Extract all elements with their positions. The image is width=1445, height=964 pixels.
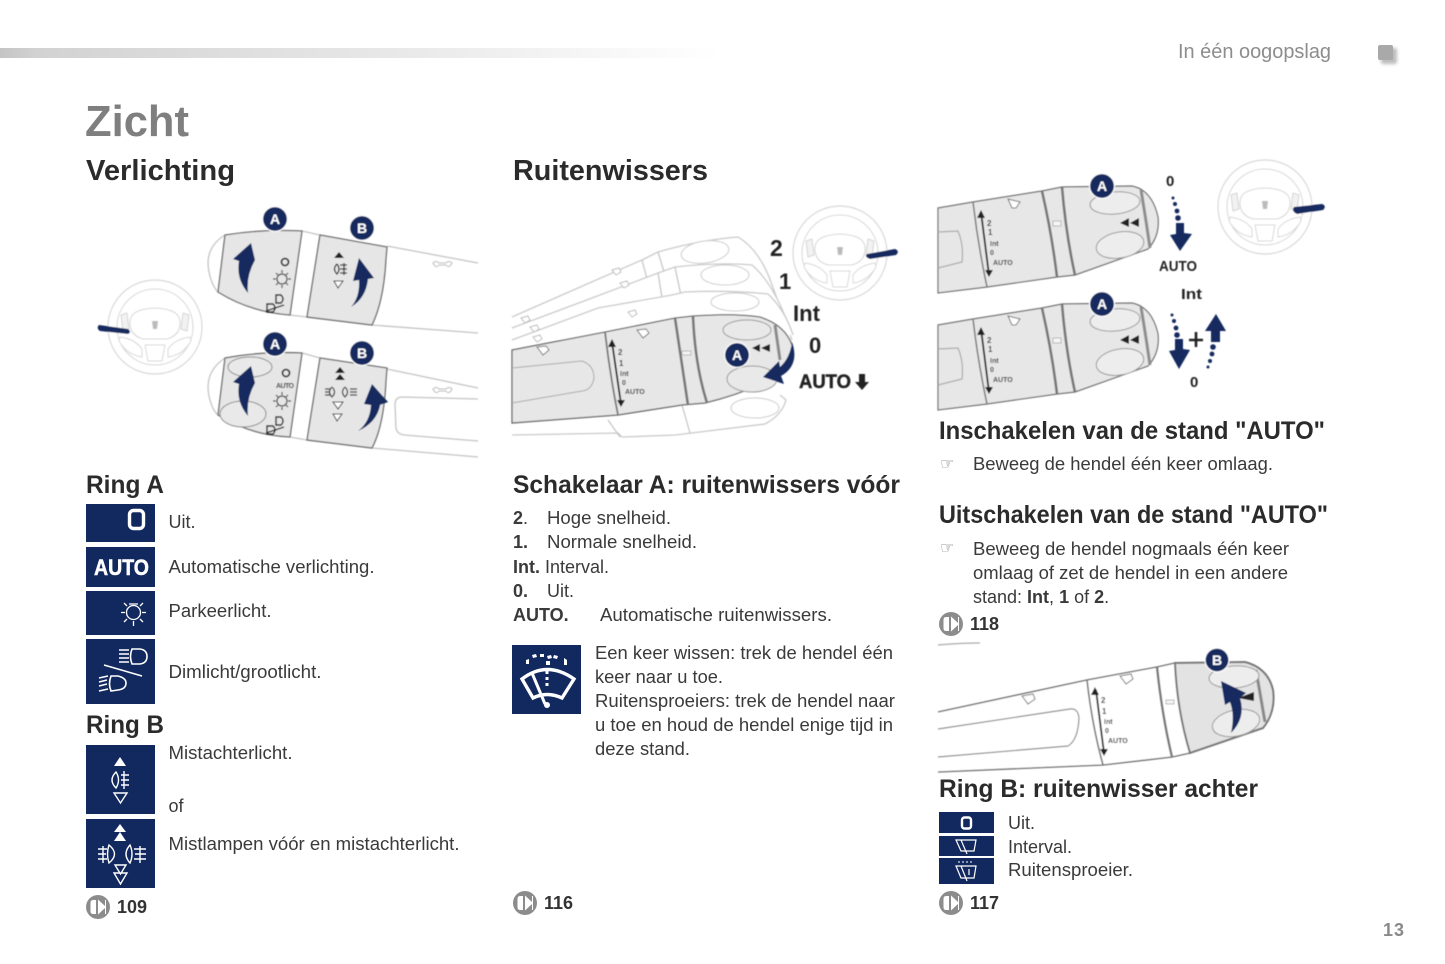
diagram: rear wiper stalk: AUTO xyxy=(1108,738,1128,745)
list: wiper positions: Uit. xyxy=(547,581,574,601)
icon: section marker xyxy=(1378,45,1397,64)
row: rear off xyxy=(939,812,1035,833)
row: rear washer xyxy=(939,858,1133,884)
reference 116 xyxy=(513,891,573,915)
reference 117: 117 xyxy=(970,893,999,913)
badge A xyxy=(262,206,288,232)
list: wiper positions: 1. xyxy=(513,532,528,552)
lower stalk: AUTO xyxy=(276,383,295,390)
text: wash wipe instructions xyxy=(595,643,895,759)
diagram: rear wiper stalk: 2 xyxy=(1101,696,1106,705)
row: dipped and main beam xyxy=(86,639,322,704)
page number: 13 xyxy=(1383,920,1404,940)
list: wiper positions: Normale snelheid. xyxy=(547,532,697,552)
badge A: A xyxy=(270,211,280,227)
main stalk: Int xyxy=(620,371,629,378)
ring symbols xyxy=(282,258,288,266)
ghost positions xyxy=(512,237,793,437)
list: wiper positions: 2. xyxy=(513,508,528,528)
ring symbols xyxy=(282,370,290,376)
badge A: A xyxy=(1097,178,1107,194)
heading: switch A: Schakelaar A: ruitenwissers vóór xyxy=(513,471,900,499)
text: disable auto: stand: Int, 1 of 2. xyxy=(973,587,1109,607)
text: wash wipe instructions: Een keer wissen: trek de hendel één xyxy=(595,643,893,663)
text: wash wipe instructions: deze stand. xyxy=(595,739,690,759)
main stalk: 2 xyxy=(618,348,623,357)
text: enable auto: ☞ xyxy=(940,454,954,473)
text: enable auto: Beweeg de hendel één keer omlaag. xyxy=(973,454,1273,474)
lower stalk xyxy=(208,332,478,457)
badge B: B xyxy=(1212,652,1222,668)
arrow xyxy=(1221,681,1246,733)
position labels: 2 xyxy=(770,235,783,261)
position labels: AUTO xyxy=(1159,258,1197,275)
position labels: Int xyxy=(793,301,821,326)
arrow xyxy=(763,342,794,384)
row: parking light xyxy=(86,591,272,635)
arrow xyxy=(233,366,255,416)
row: rear off: Uit. xyxy=(1008,813,1035,833)
list: wiper positions: Hoge snelheid. xyxy=(547,508,671,528)
heading: disable auto: Uitschakelen van de stand "AUTO" xyxy=(939,501,1328,529)
main stalk: 0 xyxy=(622,380,626,387)
arrows: down plus up xyxy=(1169,314,1226,369)
panel: auto mode xyxy=(938,160,1328,636)
list: wiper positions: AUTO. xyxy=(513,605,569,625)
panel: ruitenwissers xyxy=(512,155,900,915)
text: wash wipe instructions: keer naar u toe. xyxy=(595,667,723,687)
row: front and rear fog lights xyxy=(86,819,460,888)
badge A xyxy=(262,332,288,356)
steering wheel xyxy=(98,280,202,374)
diagram: rear wiper stalk xyxy=(938,643,1274,772)
list: wiper positions: Automatische ruitenwissers. xyxy=(600,605,832,625)
diagram: auto stalks xyxy=(938,160,1325,410)
row: rear interval xyxy=(939,836,1072,857)
diagram: rear wiper stalk: Int xyxy=(1104,719,1113,726)
heading: verlichting: Verlichting xyxy=(86,155,235,187)
main stalk xyxy=(512,315,794,423)
header gradient bar xyxy=(0,48,720,58)
position labels: 0 xyxy=(1190,374,1198,391)
reference 109: 109 xyxy=(117,897,147,917)
row: rear interval: Interval. xyxy=(1008,837,1072,857)
text: wash wipe instructions: u toe en houd de hendel enige tijd in xyxy=(595,715,893,735)
icon: wash wipe xyxy=(512,645,581,714)
upper stalk xyxy=(208,206,478,333)
arrow xyxy=(233,243,255,293)
lower stalk xyxy=(938,292,1158,410)
heading: ring B rear wiper: Ring B: ruitenwisser achter xyxy=(939,775,1258,803)
text: disable auto: omlaag of zet de hendel in een andere xyxy=(973,563,1288,583)
main stalk: 1 xyxy=(619,359,624,368)
text: wash wipe instructions: Ruitensproeiers: trek de hendel naar xyxy=(595,691,895,711)
badge B xyxy=(350,216,374,240)
heading: ruitenwissers: Ruitenwissers xyxy=(513,155,708,187)
steering wheel xyxy=(1218,160,1325,254)
badge A: A xyxy=(270,336,280,352)
position labels: 1 xyxy=(779,269,791,294)
section name: In één oogopslag xyxy=(1178,41,1331,63)
text: disable auto: ☞ xyxy=(940,538,954,557)
row: rear washer: Ruitensproeier. xyxy=(1008,860,1133,880)
badge A: A xyxy=(732,347,742,363)
row: off xyxy=(86,504,196,542)
position labels: AUTO xyxy=(799,372,851,393)
text: disable auto: Beweeg de hendel nogmaals één keer xyxy=(973,539,1289,559)
list: wiper positions xyxy=(513,508,832,625)
row: rear fog light xyxy=(86,743,292,814)
steering wheel xyxy=(793,206,898,300)
row: auto: Automatische verlichting. xyxy=(168,557,374,577)
list: wiper positions: 0. xyxy=(513,581,528,601)
badge B: B xyxy=(357,220,367,236)
badge B: B xyxy=(357,345,367,361)
badge A xyxy=(1090,292,1114,316)
badge B xyxy=(350,340,374,366)
upper stalk xyxy=(938,174,1158,293)
position labels xyxy=(770,235,869,393)
reference 117 xyxy=(939,891,999,915)
badge B xyxy=(1205,648,1229,672)
arrow: down to auto xyxy=(1170,196,1192,251)
diagram: rear wiper stalk: 0 xyxy=(1105,728,1109,735)
list: wiper positions: Int. Interval. xyxy=(513,557,609,577)
row: front and rear fog lights: Mistlampen vóór en mistachterlicht. xyxy=(168,834,460,854)
diagram: wiper stalk positions xyxy=(512,206,898,437)
position labels: 0 xyxy=(809,333,821,358)
position labels: 0 xyxy=(1166,173,1174,190)
or: of xyxy=(168,796,185,816)
heading: enable auto: Inschakelen van de stand "AUTO" xyxy=(939,417,1325,445)
position labels: Int xyxy=(1181,286,1202,303)
row: rear fog light: Mistachterlicht. xyxy=(168,743,292,763)
row: auto: AUTO xyxy=(94,555,149,580)
diagram: rear wiper stalk: 1 xyxy=(1102,707,1107,716)
heading: ring A: Ring A xyxy=(86,471,164,499)
reference 109 xyxy=(86,895,147,919)
heading: ring B: Ring B xyxy=(86,711,164,739)
reference 118: 118 xyxy=(970,614,999,634)
diagram: lighting stalks xyxy=(98,206,478,457)
main stalk: AUTO xyxy=(625,389,645,396)
badge A xyxy=(1090,174,1114,198)
panel: rear wiper xyxy=(938,643,1274,915)
row: off: Uit. xyxy=(168,512,196,532)
reference 118 xyxy=(939,612,999,636)
row: auto xyxy=(86,547,374,587)
panel: verlichting xyxy=(86,155,478,919)
title: Zicht xyxy=(85,97,189,146)
text: disable auto xyxy=(940,538,1289,607)
row: parking light: Parkeerlicht. xyxy=(168,601,272,621)
position labels xyxy=(1159,173,1202,391)
reference 116: 116 xyxy=(544,893,573,913)
row: dipped and main beam: Dimlicht/grootlicht. xyxy=(168,662,322,682)
badge A: A xyxy=(1097,296,1107,312)
badge A xyxy=(724,342,750,368)
